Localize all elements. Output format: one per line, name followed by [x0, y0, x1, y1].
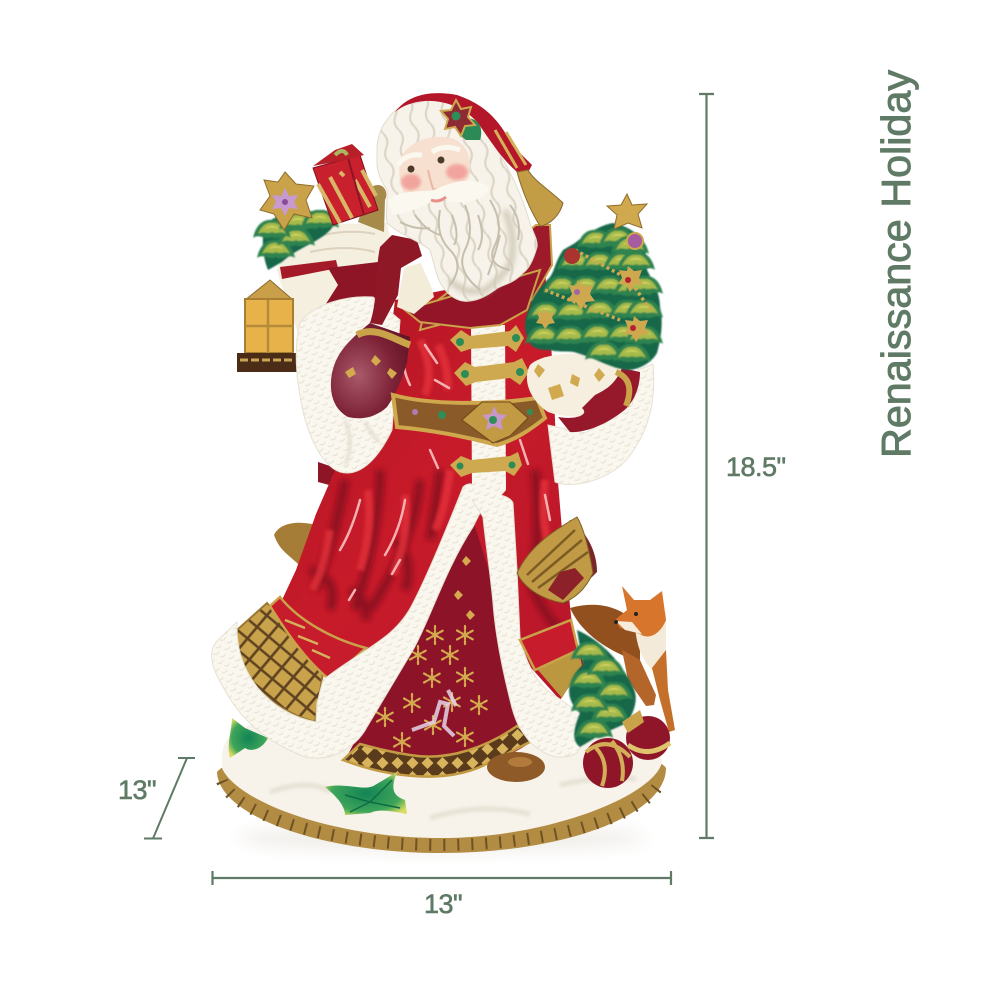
maroon under robe: [345, 520, 540, 772]
sack folds in maroon: [322, 262, 378, 310]
pine branch: [569, 630, 636, 747]
leaf on snow: [325, 772, 407, 815]
hem stripes: [285, 620, 330, 658]
snowy base: [217, 701, 666, 853]
depth label: 13": [118, 775, 156, 805]
beard and hair: [377, 99, 537, 301]
right fur sleeve: [548, 364, 654, 485]
tree star: [607, 194, 647, 229]
width dimension line: [212, 871, 671, 885]
width label: 13": [424, 889, 462, 919]
gold cuff on mitten: [616, 372, 629, 406]
white glove: [397, 263, 434, 314]
gold lower hem: [343, 726, 537, 777]
hem band: [270, 597, 366, 680]
sack tie: [280, 260, 338, 279]
small leaf: [229, 718, 268, 758]
snowy ball: [527, 354, 637, 417]
product title: Renaissance Holiday: [873, 69, 919, 458]
depth dimension line: [144, 758, 195, 838]
christmas tree: [525, 223, 663, 370]
brown shoe: [487, 752, 545, 782]
fox: [570, 586, 675, 732]
gold piece behind robe: [274, 523, 320, 568]
maroon trim behind sleeve: [318, 462, 336, 486]
height dimension line: [699, 94, 714, 838]
gold frog closures: [450, 325, 529, 477]
height label: 18.5": [726, 452, 786, 482]
face: [399, 137, 470, 196]
maroon mitten: [331, 323, 410, 418]
frog jewels: [456, 334, 524, 470]
ornaments: [583, 710, 670, 788]
red mitten on ball: [558, 368, 640, 432]
gold tassel: [517, 170, 563, 226]
tree ornaments: [536, 266, 649, 342]
left fur sleeve: [296, 297, 400, 473]
strap: [420, 225, 552, 330]
sack: [277, 223, 400, 350]
collar: [405, 270, 540, 328]
lantern: [237, 280, 297, 372]
mustache: [388, 181, 490, 215]
right red hem: [520, 620, 578, 670]
left fur trim: [212, 484, 484, 758]
right fur trim: [472, 494, 582, 757]
raised sleeve: [370, 235, 422, 325]
gold purse: [517, 517, 597, 604]
hat: [395, 93, 532, 178]
robe upper and skirt: [270, 270, 584, 700]
gold lattice panel: [237, 603, 323, 722]
cheeks: [401, 164, 468, 190]
right gold hem: [538, 628, 582, 698]
ground shadow: [236, 824, 646, 852]
santa figurine: [212, 93, 675, 853]
gold star with flower: [260, 172, 314, 230]
belt: [393, 395, 545, 445]
tree foliage: [525, 223, 663, 370]
present: [313, 144, 378, 225]
poinsettia on hat: [441, 100, 481, 140]
pine greenery on sack: [253, 210, 339, 270]
central fur strip: [471, 325, 506, 502]
pine sprig beside present: [358, 185, 386, 232]
